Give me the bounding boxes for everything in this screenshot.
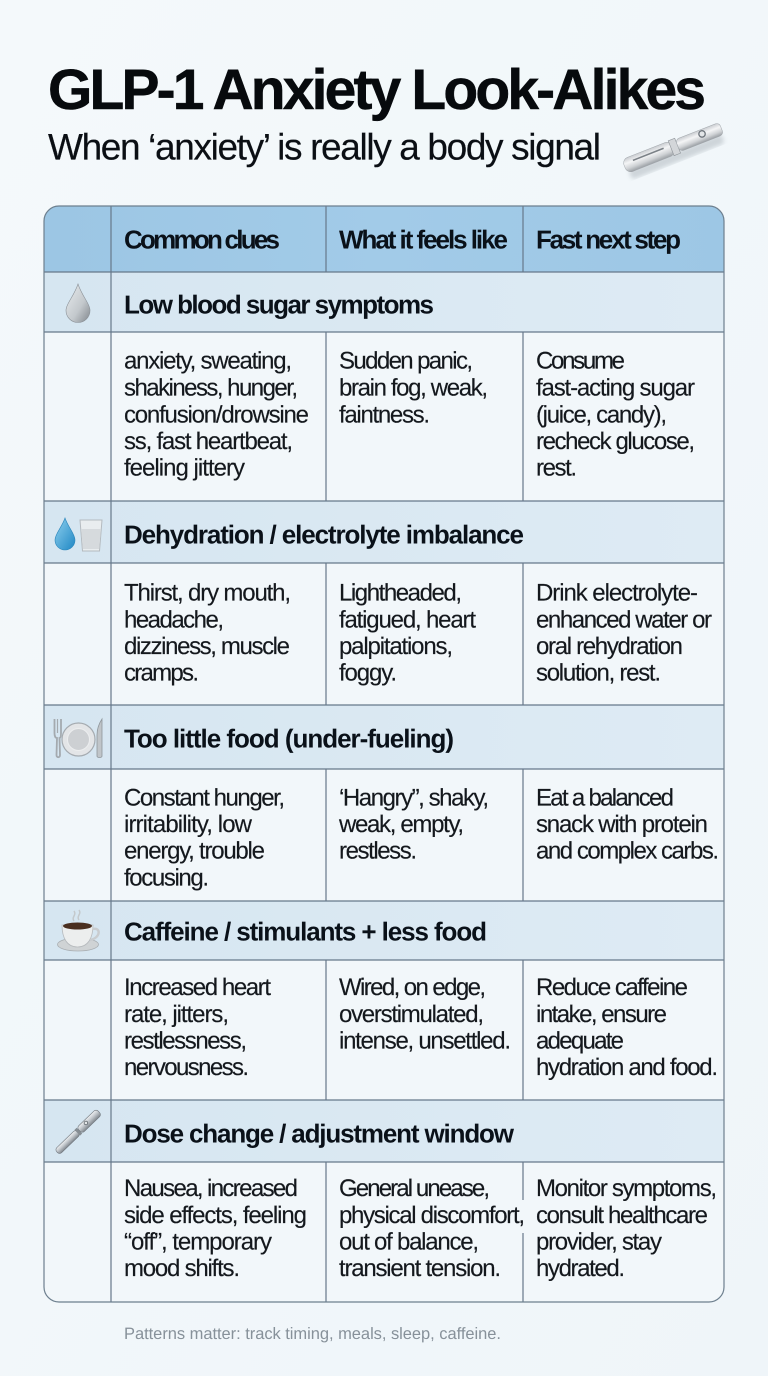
row: low blood sugar next step: fast-acting sugar [536, 374, 695, 402]
row: under-fueling clues: energy, trouble [124, 838, 265, 864]
row: dehydration feeling [339, 580, 476, 686]
section heading: low blood sugar: Low blood sugar symptoms [124, 290, 434, 320]
section bands [44, 272, 724, 1162]
row: caffeine feeling: overstimulated, [339, 1001, 484, 1028]
table body background [44, 206, 724, 1302]
row: under-fueling next step [536, 784, 719, 864]
row: under-fueling feeling: restless. [339, 838, 417, 864]
row: dehydration feeling: Lightheaded, [339, 580, 462, 606]
row: dehydration clues: cramps. [124, 660, 199, 686]
row: caffeine next step: intake, ensure [536, 1001, 667, 1028]
row: dehydration next step: oral rehydration [536, 633, 683, 660]
row: dehydration clues: headache, [124, 606, 224, 634]
column headers: Fast next step [536, 224, 681, 254]
section heading: dehydration: Dehydration / electrolyte imbalance [124, 520, 524, 550]
section heading: caffeine: Caffeine / stimulants + less food [124, 916, 487, 946]
row: dose change feeling: out of balance, [339, 1228, 479, 1256]
icon: injector pen [622, 121, 727, 181]
row: dehydration feeling: palpitations, [339, 633, 453, 660]
subtitle: When ‘anxiety’ is really a body signal [48, 126, 601, 168]
row: low blood sugar next step: Consume [536, 348, 625, 374]
row: caffeine feeling: intense, unsettled. [339, 1028, 511, 1054]
column headers [124, 224, 681, 254]
row: under-fueling clues: Constant hunger, [124, 784, 285, 812]
row: dose change clues [124, 1175, 307, 1282]
row: dehydration clues: Thirst, dry mouth, [124, 580, 291, 606]
row: dose change clues: mood shifts. [124, 1255, 240, 1282]
row: caffeine clues: nervousness. [124, 1054, 249, 1081]
section heading: too little food: Too little food (under-fueling) [124, 724, 454, 754]
icon: water drop and glass [55, 518, 102, 551]
row: low blood sugar next step [536, 348, 695, 482]
row: low blood sugar clues: anxiety, sweating, [124, 348, 292, 374]
row: dose change next step [536, 1175, 717, 1282]
column headers: What it feels like [339, 224, 508, 254]
row: under-fueling clues: irritability, low [124, 811, 253, 838]
row: under-fueling feeling [338, 784, 489, 864]
row: low blood sugar feeling: brain fog, weak, [339, 374, 488, 402]
row: dose change clues: “off”, temporary [124, 1228, 272, 1256]
row: dehydration feeling: fatigued, heart [339, 606, 476, 634]
comparison table [44, 206, 724, 1302]
row: low blood sugar next step: recheck glucose, [536, 428, 695, 455]
row: dose change next step: hydrated. [536, 1255, 625, 1282]
row: dose change next step: Monitor symptoms, [536, 1175, 717, 1202]
row: dose change feeling [339, 1175, 525, 1282]
row: caffeine clues [124, 974, 271, 1081]
row: caffeine feeling [339, 974, 511, 1054]
row: dose change feeling: General unease, [339, 1175, 490, 1202]
row: low blood sugar clues: ss, fast heartbeat, [124, 428, 293, 455]
row: dehydration next step [536, 580, 712, 686]
row: dose change feeling: transient tension. [339, 1255, 501, 1282]
section heading: dose change: Dose change / adjustment window [124, 1118, 515, 1148]
column headers: Common clues [124, 224, 280, 254]
row: caffeine next step: adequate [536, 1028, 624, 1054]
row: dose change clues: Nausea, increased [124, 1175, 298, 1202]
row: caffeine next step: hydration and food. [536, 1054, 718, 1081]
row: dose change clues: side effects, feeling [124, 1202, 307, 1229]
row: low blood sugar clues: feeling jittery [124, 454, 245, 482]
row: under-fueling clues: focusing. [124, 864, 209, 892]
row: low blood sugar clues: shakiness, hunger, [124, 374, 298, 402]
row: dehydration feeling: foggy. [339, 660, 397, 686]
row: under-fueling next step: and complex carbs. [536, 838, 719, 864]
icon: silver drop [66, 284, 90, 322]
row: caffeine next step: Reduce caffeine [536, 974, 688, 1001]
footer note: Patterns matter: track timing, meals, sleep, caffeine. [124, 1325, 501, 1343]
icon: coffee cup [58, 910, 99, 951]
row: dehydration next step: enhanced water or [536, 606, 712, 634]
row: caffeine next step [536, 974, 718, 1081]
row: low blood sugar feeling [339, 348, 488, 428]
row: under-fueling next step: snack with protein [536, 811, 708, 838]
row: low blood sugar feeling: faintness. [339, 402, 430, 428]
row: dehydration next step: Drink electrolyte- [536, 580, 698, 606]
icon: plate with fork and knife [54, 719, 102, 758]
row: dose change feeling: physical discomfort, [339, 1202, 525, 1229]
row: under-fueling next step: Eat a balanced [536, 784, 674, 812]
row: caffeine clues: rate, jitters, [124, 1001, 229, 1028]
row: caffeine clues: restlessness, [124, 1028, 247, 1054]
row: under-fueling feeling: weak, empty, [338, 811, 464, 838]
row: low blood sugar clues [124, 348, 309, 482]
row: low blood sugar clues: confusion/drowsine [124, 402, 309, 428]
icon: pen [54, 1109, 102, 1155]
title: GLP-1 Anxiety Look-Alikes [48, 58, 706, 122]
row: dehydration clues: dizziness, muscle [124, 633, 290, 660]
row: low blood sugar next step: (juice, candy), [536, 402, 667, 428]
row: dehydration clues [124, 580, 291, 686]
row: dose change next step: provider, stay [536, 1228, 662, 1256]
row: dehydration next step: solution, rest. [536, 660, 661, 686]
row: under-fueling feeling: ‘Hangry”, shaky, [339, 784, 489, 812]
row: low blood sugar next step: rest. [536, 454, 577, 482]
row: low blood sugar feeling: Sudden panic, [339, 348, 473, 374]
row: caffeine feeling: Wired, on edge, [339, 974, 486, 1001]
row: caffeine clues: Increased heart [124, 974, 271, 1001]
table header band [44, 206, 724, 272]
row: under-fueling clues [124, 784, 285, 892]
row: dose change next step: consult healthcare [536, 1202, 708, 1229]
